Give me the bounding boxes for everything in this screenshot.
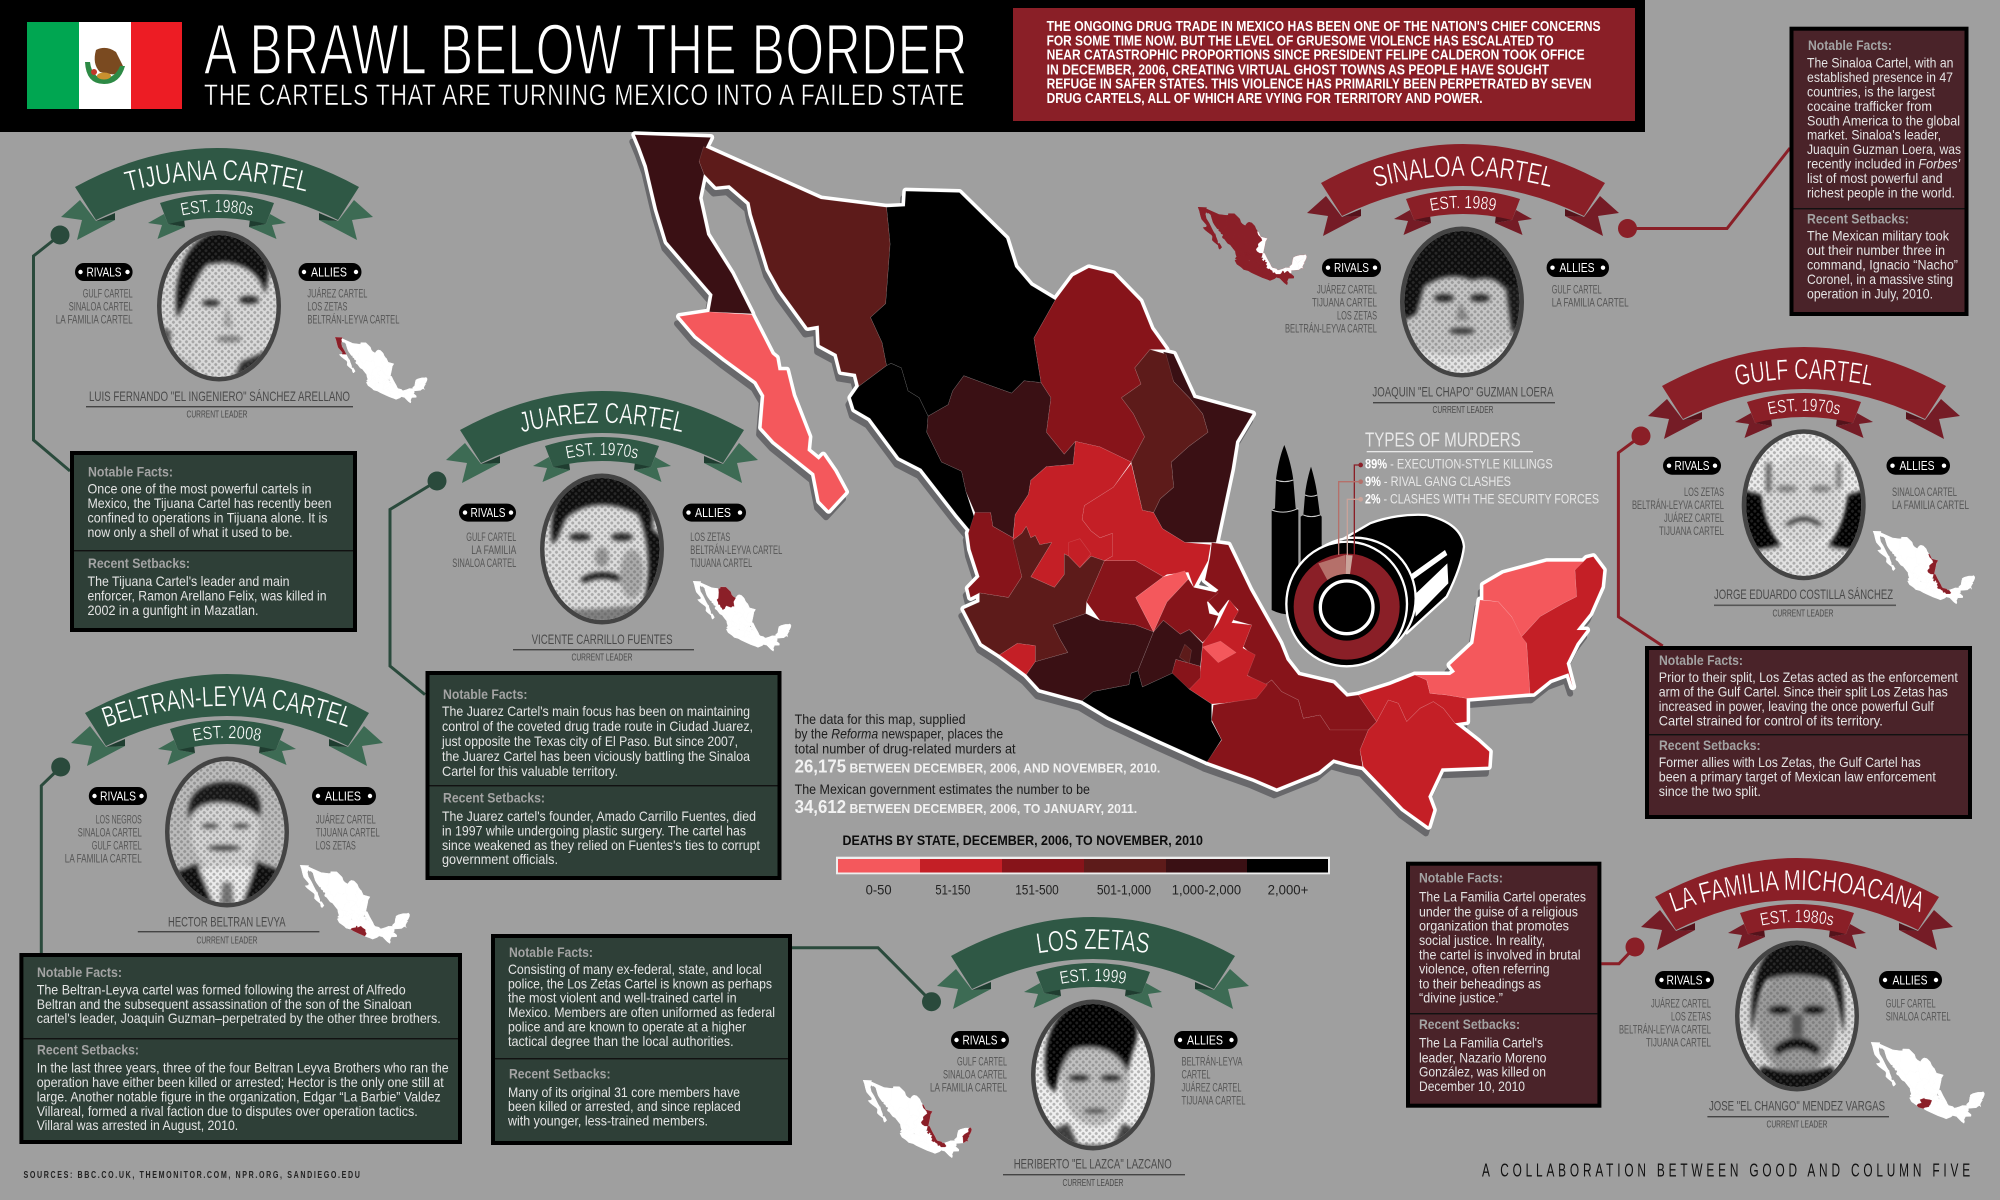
allies tag: ALLIES [695, 505, 731, 520]
icon: bullets chart for types of murders [1272, 445, 1464, 666]
facts box: Beltran-Leyva: Villaral was arrested in August, 2010. [37, 1117, 238, 1133]
facts box: Sinaloa: The Sinaloa Cartel, with an [1807, 55, 1953, 71]
panel: Juarez Cartel [426, 391, 792, 880]
rivals tag [1655, 971, 1714, 989]
banner: Juarez Cartel: JUAREZ CARTEL [521, 402, 682, 432]
allies list: JUÁREZ CARTEL [1182, 1082, 1242, 1095]
banner: Sinaloa Cartel [1307, 144, 1619, 236]
subtitle: THE CARTELS THAT ARE TURNING MEXICO INTO A FAILED STATE [204, 79, 965, 112]
facts box: Los Zetas: Mexico. Members are often uniformed as federal [508, 1004, 775, 1020]
leader name: CURRENT LEADER [1432, 404, 1494, 416]
allies tag [1174, 1031, 1238, 1049]
facts box: Juarez: control of the coveted drug trade route in Ciudad Juarez, [442, 718, 753, 734]
facts box: Sinaloa: established presence in 47 [1807, 69, 1953, 85]
allies tag [683, 504, 746, 522]
banner: Juarez Cartel [446, 391, 758, 483]
map data text block: The Mexican government estimates the number to be [795, 781, 1090, 797]
facts box: Beltran-Leyva: Villareal, formed a rival faction due to disputes over operation tactics. [37, 1103, 418, 1119]
facts box: Los Zetas: police, the Los Zetas Cartel is known as perhaps [508, 976, 772, 992]
facts box: Sinaloa: market. Sinaloa's leader, [1807, 127, 1941, 143]
portrait: Jose Mendez Vargas [1735, 938, 1859, 1096]
facts box: Sinaloa: Notable Facts: [1808, 37, 1892, 53]
intro box: FOR SOME TIME NOW. BUT THE LEVEL OF GRUESOME VIOLENCE HAS ESCALATED TO [1047, 33, 1554, 49]
allies tag [1886, 457, 1950, 475]
leader name [1003, 1156, 1185, 1189]
rivals tag: RIVALS [1334, 260, 1369, 275]
rivals tag: RIVALS [962, 1032, 998, 1048]
leader name: CURRENT LEADER [1772, 607, 1834, 619]
allies tag [1879, 971, 1942, 989]
leader name: CURRENT LEADER [572, 651, 633, 663]
types of murders legend [1365, 430, 1599, 507]
facts box: La Familia: violence, often referring [1419, 961, 1550, 977]
rivals list [930, 1057, 1007, 1095]
allies list [1886, 998, 1951, 1023]
allies tag: ALLIES [311, 264, 347, 280]
leader name: JOSE "EL CHANGO" MENDEZ VARGAS [1709, 1098, 1885, 1114]
map color scale legend: DEATHS BY STATE, DECEMBER, 2006, TO NOVEMBER, 2010 [842, 832, 1203, 848]
choropleth map of Mexico [632, 135, 1603, 833]
rivals list: JUÁREZ CARTEL [1664, 512, 1724, 525]
rivals list: GULF CARTEL [957, 1057, 1007, 1069]
facts box: La Familia: organization that promotes [1419, 918, 1569, 934]
facts box: Tijuana: Mexico, the Tijuana Cartel has recently been [88, 495, 332, 511]
mini map: Los Zetas territory [863, 1080, 972, 1158]
rivals list: SINALOA CARTEL [452, 558, 517, 570]
leader name [138, 914, 319, 946]
allies list: SINALOA CARTEL [1892, 487, 1957, 499]
map data text block [795, 711, 1160, 817]
allies tag: ALLIES [325, 788, 361, 804]
allies list: SINALOA CARTEL [1886, 1011, 1951, 1023]
allies list: BELTRÁN-LEYVA [1182, 1056, 1243, 1069]
rivals list: LOS ZETAS [1337, 310, 1377, 322]
rivals list: BELTRÁN-LEYVA CARTEL [1285, 322, 1377, 335]
leader name: JOAQUIN "EL CHAPO" GUZMAN LOERA [1372, 384, 1554, 400]
allies list: LA FAMILIA CARTEL [1892, 500, 1969, 512]
facts box: Beltran-Leyva: operation have either been killed or arrested; Hector is the only one still at [37, 1074, 444, 1090]
banner: Los Zetas: LOS ZETAS [1036, 929, 1150, 954]
intro box: DRUG CARTELS, ALL OF WHICH ARE VYING FOR TERRITORY AND POWER. [1047, 91, 1483, 107]
facts box: Los Zetas: Notable Facts: [509, 944, 593, 960]
facts box: Sinaloa: Recent Setbacks: [1807, 210, 1909, 226]
types of murders legend: TYPES OF MURDERS [1365, 430, 1521, 452]
mini map: Sinaloa territory [1198, 207, 1307, 285]
map data text block: The data for this map, supplied [795, 711, 966, 727]
banner: La Familia Michoacana: LA FAMILIA MICHOACANA [1668, 870, 1922, 912]
facts box: Sinaloa [1792, 29, 1966, 314]
facts box: Tijuana: Notable Facts: [88, 464, 173, 480]
facts box: Los Zetas: Recent Setbacks: [509, 1066, 610, 1082]
map data text block: by the Reforma newspaper, places the [795, 726, 1003, 742]
facts box: Tijuana: now only a shell of what it used to be. [88, 524, 292, 540]
allies list: LOS ZETAS [690, 532, 731, 544]
rivals list: TIJUANA CARTEL [1312, 297, 1377, 309]
facts box: Beltran-Leyva [21, 955, 460, 1142]
rivals list: TIJUANA CARTEL [1646, 1037, 1711, 1049]
rivals tag: RIVALS [470, 505, 506, 520]
rivals list: JUÁREZ CARTEL [1317, 283, 1377, 296]
facts box: Los Zetas: Consisting of many ex-federal, state, and local [508, 961, 762, 977]
allies list: LA FAMILIA CARTEL [1552, 297, 1629, 309]
intro box: IN DECEMBER, 2006, CREATING VIRTUAL GHOST TOWNS AS PEOPLE HAVE SOUGHT [1047, 62, 1549, 78]
facts box: Beltran-Leyva: The Beltran-Leyva cartel was formed following the arrest of Alfredo [37, 982, 406, 998]
facts box: Juarez: Cartel for this valuable territory. [442, 763, 618, 779]
rivals list: JUÁREZ CARTEL [1651, 997, 1711, 1010]
facts box: La Familia: The La Familia Cartel's [1419, 1035, 1543, 1051]
allies list: LOS ZETAS [316, 840, 356, 852]
allies list: JUÁREZ CARTEL [316, 814, 376, 826]
allies list [1182, 1056, 1246, 1108]
facts box: Juarez: Recent Setbacks: [443, 790, 545, 806]
rivals tag [1322, 258, 1381, 277]
rivals list: LA FAMILIA CARTEL [65, 853, 142, 865]
leader name: LUIS FERNANDO "EL INGENIERO" SÁNCHEZ ARELLANO [89, 388, 350, 404]
facts box: Beltran-Leyva: In the last three years, three of the four Beltran Leyva Brothers who ran the [37, 1060, 449, 1076]
allies list: BELTRÁN-LEYVA CARTEL [307, 313, 400, 326]
map color scale legend: 151-500 [1015, 883, 1059, 898]
mini map: Juarez territory [693, 581, 791, 651]
rivals list: SINALOA CARTEL [69, 301, 133, 313]
mini map: Beltran-Leyva territory [300, 865, 410, 943]
allies list: GULF CARTEL [1886, 998, 1936, 1010]
leader name: JORGE EDUARDO COSTILLA SÁNCHEZ [1714, 586, 1893, 602]
facts box: Sinaloa: list of most powerful and [1807, 170, 1943, 186]
facts box: Gulf: arm of the Gulf Cartel. Since their split Los Zetas has [1659, 684, 1948, 700]
rivals list [1632, 487, 1724, 538]
facts box: Beltran-Leyva: Notable Facts: [37, 964, 122, 980]
rivals list: LOS ZETAS [1671, 1011, 1711, 1023]
intro box: THE ONGOING DRUG TRADE IN MEXICO HAS BEEN ONE OF THE NATION'S CHIEF CONCERNS [1047, 19, 1601, 35]
banner: Beltran-Leyva Cartel: EST. 2008 [192, 726, 261, 741]
facts box: La Familia [1408, 864, 1599, 1106]
rivals list: LOS NEGROS [96, 814, 142, 826]
leader name: CURRENT LEADER [186, 409, 248, 421]
panel: Tijuana Cartel [56, 148, 428, 632]
facts box: Sinaloa: The Mexican military took [1807, 228, 1950, 244]
facts box: Los Zetas: Many of its original 31 core members have [508, 1084, 740, 1100]
facts box: Juarez: The Juarez Cartel's main focus has been on maintaining [442, 703, 750, 719]
icon: Mexican flag [27, 22, 182, 109]
rivals list: BELTRÁN-LEYVA CARTEL [1632, 499, 1724, 512]
leader name [1714, 586, 1896, 619]
mini map: La Familia territory [1871, 1042, 1984, 1123]
allies tag: ALLIES [1900, 458, 1935, 473]
portrait: Luis Fernando Sanchez Arellano [157, 228, 281, 386]
rivals list: SINALOA CARTEL [78, 827, 142, 839]
banner: Los Zetas: EST. 1999 [1060, 968, 1126, 984]
facts box: Sinaloa: recently included in Forbes' [1807, 156, 1961, 172]
mini map: Gulf territory [1873, 531, 1975, 604]
facts box: Tijuana: The Tijuana Cartel's leader and main [88, 573, 290, 589]
types of murders legend: 9% - RIVAL GANG CLASHES [1365, 474, 1511, 489]
rivals list [65, 814, 142, 865]
header bar [0, 0, 1645, 132]
sources footer: SOURCES: BBC.CO.UK, THEMONITOR.COM, NPR.ORG, SANDIEGO.EDU [24, 1169, 362, 1181]
allies list: TIJUANA CARTEL [316, 827, 380, 839]
banner: La Familia Michoacana [1641, 858, 1953, 950]
facts box: Beltran-Leyva: cartel's leader, Joaquin Guzman–perpetrated by the other three brothers. [37, 1010, 441, 1026]
banner: Los Zetas [937, 917, 1249, 1009]
allies list: BELTRÁN-LEYVA CARTEL [690, 544, 783, 557]
rivals list: LA FAMILIA [471, 545, 517, 557]
facts box: Gulf: Notable Facts: [1659, 652, 1743, 668]
allies tag [1547, 258, 1609, 277]
allies tag: ALLIES [1892, 972, 1928, 988]
facts box: Juarez: in 1997 while undergoing plastic surgery. The cartel has [442, 822, 746, 838]
facts box: Sinaloa: South America to the global [1807, 112, 1960, 128]
intro box [1013, 8, 1635, 121]
facts box: Gulf: Cartel strained for control of its territory. [1659, 712, 1883, 728]
facts box: Gulf: increased in power, leaving the once powerful Gulf [1659, 698, 1934, 714]
leader name: CURRENT LEADER [1766, 1119, 1828, 1131]
rivals tag: RIVALS [100, 788, 136, 804]
allies list [1892, 487, 1969, 512]
leader name [1372, 384, 1555, 416]
facts box: Juarez: Notable Facts: [443, 686, 528, 702]
intro box: NEAR CATASTROPHIC PROPORTIONS SINCE PRESIDENT FELIPE CALDERON TOOK OFFICE [1047, 48, 1585, 64]
facts box: Sinaloa: Coronel, in a massive sting [1807, 271, 1953, 287]
banner: Gulf Cartel: EST. 1970s [1768, 398, 1840, 414]
map color scale legend: 0-50 [866, 883, 892, 898]
rivals list: LOS ZETAS [1684, 487, 1724, 499]
portrait: Vicente Carrillo Fuentes [540, 471, 664, 629]
allies tag [312, 787, 376, 805]
facts box: Gulf: since the two split. [1659, 783, 1761, 799]
facts box: Beltran-Leyva: Recent Setbacks: [37, 1041, 139, 1057]
connector lines and dots [34, 148, 1790, 1011]
banner: Tijuana Cartel: EST. 1980s [180, 200, 253, 216]
rivals list: SINALOA CARTEL [943, 1070, 1007, 1082]
banner: Sinaloa Cartel: EST. 1989 [1430, 196, 1496, 211]
facts box: Los Zetas [493, 936, 790, 1143]
allies list [316, 814, 380, 852]
leader name: HECTOR BELTRAN LEVYA [168, 914, 286, 930]
facts box: Tijuana: Recent Setbacks: [88, 555, 190, 571]
rivals list: LA FAMILIA CARTEL [56, 314, 133, 326]
facts box: Juarez: the Juarez Cartel has been viciously battling the Sinaloa [442, 748, 750, 764]
facts box: Tijuana: Once one of the most powerful cartels in [88, 481, 312, 497]
banner: Juarez Cartel: EST. 1970s [566, 442, 638, 458]
map color scale legend: 2,000+ [1268, 883, 1308, 898]
allies list: GULF CARTEL [1552, 284, 1602, 296]
map data text block: 26,175 BETWEEN DECEMBER, 2006, AND NOVEMBER, 2010. [795, 756, 1160, 776]
title: A BRAWL BELOW THE BORDER [204, 11, 968, 90]
banner: Beltran-Leyva Cartel: BELTRAN-LEYVA CARTEL [101, 686, 348, 727]
facts box: Tijuana: enforcer, Ramon Arellano Felix, was killed in [88, 588, 326, 604]
rivals tag: RIVALS [1666, 972, 1703, 988]
rivals list: BELTRÁN-LEYVA CARTEL [1619, 1023, 1711, 1036]
allies tag: ALLIES [1560, 260, 1595, 275]
facts box: La Familia: social justice. In reality, [1419, 932, 1545, 948]
facts box: Sinaloa: command, Ignacio “Nacho” [1807, 257, 1958, 273]
facts box: La Familia: Recent Setbacks: [1419, 1016, 1520, 1032]
allies list: CARTEL [1182, 1070, 1211, 1082]
facts box: Sinaloa: operation in July, 2010. [1807, 285, 1933, 301]
rivals list: GULF CARTEL [92, 840, 142, 852]
facts box: Beltran-Leyva: Beltran and the subsequent assassination of the son of the Sinaloan [37, 996, 412, 1012]
banner: Tijuana Cartel [61, 148, 373, 240]
facts box: Sinaloa: out their number three in [1807, 242, 1945, 258]
facts box: Juarez: since weakened as they relied on Fuentes's ties to corrupt [442, 837, 760, 853]
leader name [1707, 1098, 1889, 1131]
facts box: Juarez: just opposite the Texas city of El Paso. But since 2007, [441, 733, 738, 749]
types of murders legend: 89% - EXECUTION-STYLE KILLINGS [1365, 456, 1553, 471]
allies list: TIJUANA CARTEL [690, 558, 753, 570]
facts box: Los Zetas: the most violent and well-trained cartel in [508, 990, 737, 1006]
panel: Sinaloa Cartel [1198, 26, 1968, 416]
mini map: Tijuana territory [335, 337, 427, 403]
facts box: Juarez: government officials. [442, 851, 558, 867]
facts box: La Familia: under the guise of a religious [1419, 903, 1578, 919]
map color scale legend [836, 832, 1330, 898]
facts box: La Familia: Notable Facts: [1419, 870, 1503, 886]
facts box: Sinaloa: Juaquin Guzman Loera, was [1807, 141, 1961, 157]
facts box: Los Zetas: tactical degree than the local authorities. [508, 1033, 734, 1049]
facts box: La Familia: González, was killed on [1419, 1064, 1546, 1080]
rivals tag [75, 263, 133, 281]
rivals list: GULF CARTEL [466, 532, 517, 544]
leader name [86, 388, 353, 421]
rivals list: GULF CARTEL [83, 288, 133, 300]
allies tag: ALLIES [1187, 1032, 1223, 1048]
facts box: Sinaloa: richest people in the world. [1807, 184, 1955, 200]
facts box: La Familia: leader, Nazario Moreno [1419, 1049, 1547, 1065]
leader name: CURRENT LEADER [196, 934, 258, 946]
rivals tag: RIVALS [86, 264, 122, 280]
facts box: Gulf [1647, 648, 1970, 817]
leader name: HERIBERTO "EL LAZCA" LAZCANO [1014, 1156, 1172, 1172]
portrait: Joaquin Guzman Loera [1400, 226, 1524, 382]
banner: Gulf Cartel [1648, 347, 1960, 439]
banner: La Familia Michoacana: EST. 1980s [1760, 910, 1834, 926]
panel: Los Zetas [491, 917, 1249, 1189]
facts box: La Familia: to their beheadings as [1419, 975, 1541, 991]
map data text block: 34,612 BETWEEN DECEMBER, 2006, TO JANUARY, 2011. [795, 797, 1137, 817]
facts box: Sinaloa: countries, is the largest [1807, 84, 1935, 100]
facts box: Gulf: Recent Setbacks: [1659, 737, 1761, 753]
intro box: REFUGE IN SAFER STATES. THIS VIOLENCE HAS PRIMARILY BEEN PERPETRATED BY SEVEN [1047, 77, 1592, 93]
facts box: Sinaloa: cocaine trafficker from [1807, 98, 1932, 114]
portrait: Hector Beltran Leyva [165, 756, 289, 912]
leader name: VICENTE CARRILLO FUENTES [532, 631, 673, 647]
facts box: La Familia: The La Familia Cartel operates [1419, 889, 1586, 905]
panel: Beltran-Leyva Cartel [19, 674, 462, 1144]
rivals list: TIJUANA CARTEL [1659, 526, 1724, 538]
facts box: Los Zetas: been killed or arrested, and since replaced [508, 1098, 741, 1114]
allies list: JUÁREZ CARTEL [307, 287, 368, 300]
rivals tag [951, 1031, 1009, 1049]
allies list [307, 287, 400, 326]
leader name: CURRENT LEADER [1062, 1177, 1124, 1189]
banner: Beltran-Leyva Cartel [71, 674, 383, 766]
facts box: Beltran-Leyva: large. Another notable figure in the organization, Edgar “La Barbie” Valdez [37, 1089, 441, 1105]
rivals tag [89, 787, 147, 805]
banner: Sinaloa Cartel: SINALOA CARTEL [1373, 156, 1550, 188]
map color scale legend: 51-150 [935, 883, 970, 898]
allies list [690, 532, 783, 570]
facts box: La Familia: the cartel is involved in brutal [1419, 946, 1580, 962]
facts box: Tijuana: 2002 in a gunfight in Mazatlan. [88, 602, 258, 618]
facts box: Tijuana: confined to operations in Tijuana alone. It is [88, 510, 328, 526]
facts box: Tijuana [72, 453, 355, 630]
leader name [513, 631, 694, 663]
rivals list: LA FAMILIA CARTEL [930, 1083, 1007, 1095]
rivals list [452, 532, 517, 570]
portrait: Jorge Eduardo Costilla Sanchez [1742, 429, 1866, 585]
allies list: TIJUANA CARTEL [1182, 1096, 1246, 1108]
facts box: Gulf: been a primary target of Mexican law enforcement [1659, 769, 1936, 785]
allies tag [298, 263, 362, 281]
rivals tag [1663, 457, 1721, 475]
facts box: Los Zetas: police and are known to operate at a higher [508, 1019, 746, 1035]
panel: La Familia Michoacana [1406, 858, 1985, 1131]
facts box: Gulf: Prior to their split, Los Zetas acted as the enforcement [1659, 669, 1958, 685]
rivals tag: RIVALS [1674, 458, 1710, 473]
banner: Gulf Cartel: GULF CARTEL [1735, 358, 1872, 386]
facts box: Juarez: The Juarez cartel's founder, Amado Carrillo Fuentes, died [442, 808, 756, 824]
facts box: Los Zetas: with younger, less-trained members. [507, 1113, 708, 1129]
rivals list [1619, 997, 1711, 1049]
facts box: Gulf: Former allies with Los Zetas, the Gulf Cartel has [1659, 754, 1921, 770]
rivals list [56, 288, 133, 326]
facts box: Juarez [428, 673, 780, 878]
map color scale legend: 1,000-2,000 [1172, 883, 1241, 898]
facts box: La Familia: December 10, 2010 [1419, 1078, 1525, 1094]
allies list [1552, 284, 1629, 309]
panel: Gulf Cartel [1632, 347, 1975, 819]
facts box: La Familia: “divine justice.” [1419, 990, 1503, 1006]
banner: Tijuana Cartel: TIJUANA CARTEL [123, 160, 306, 192]
rivals list [1285, 283, 1377, 335]
portrait: Heriberto Lazcano [1031, 997, 1155, 1155]
types of murders legend: 2% - CLASHES WITH THE SECURITY FORCES [1365, 492, 1599, 507]
map data text block: total number of drug-related murders at [795, 740, 1016, 756]
rivals tag [459, 504, 516, 522]
allies list: LOS ZETAS [307, 301, 348, 313]
map color scale legend: 501-1,000 [1097, 883, 1151, 898]
